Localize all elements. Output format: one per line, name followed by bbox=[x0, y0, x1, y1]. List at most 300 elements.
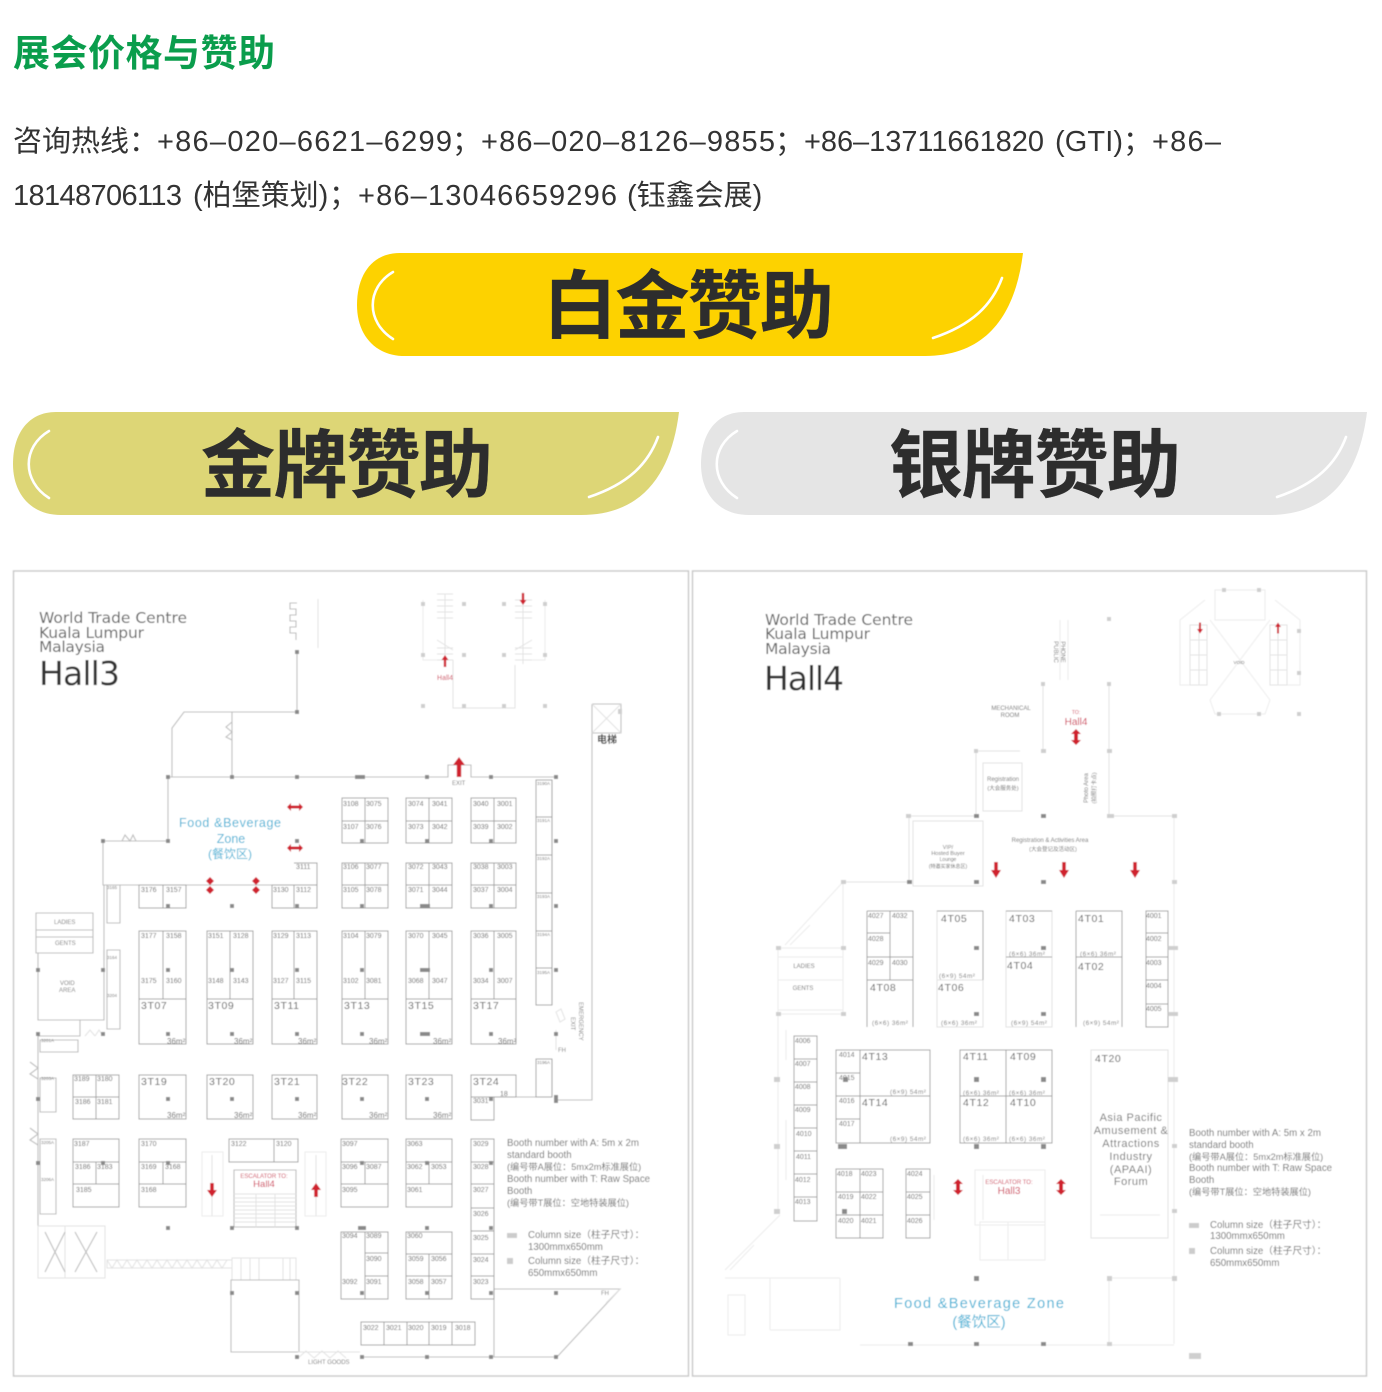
Hall 3 booth areas: 36m² bbox=[433, 1111, 452, 1120]
Hall 3 booth numbers: 3071 bbox=[408, 887, 424, 894]
Hall 3 booth numbers: 3105 bbox=[343, 887, 359, 894]
Hall 4 room labels: (大会登记及活动区) bbox=[1029, 845, 1077, 853]
contact hotline text: ； bbox=[329, 180, 358, 212]
Hall 3 legend: 650mmx650mm bbox=[528, 1268, 597, 1279]
Hall 3 raw space booths: 3T11 bbox=[274, 1000, 300, 1012]
Hall 4 heading: Hall4 bbox=[764, 659, 844, 698]
Hall 4 room labels: MECHANICAL bbox=[991, 706, 1031, 712]
Hall 4 food and beverage zone label: Food &Beverage Zone bbox=[894, 1296, 1064, 1312]
Hall 3 heading: World Trade Centre bbox=[39, 609, 187, 627]
Hall 4 escalator labels bbox=[985, 710, 1088, 1197]
Hall 3 booth numbers: 3186 bbox=[75, 1164, 91, 1171]
Hall 4 room labels: VOID bbox=[1233, 660, 1245, 665]
Hall 3 booth numbers: 3058 bbox=[408, 1279, 424, 1286]
Hall 3 room labels: EMERGENCY bbox=[577, 1002, 583, 1041]
Hall 4 raw space booths: 4T10 bbox=[1010, 1097, 1036, 1109]
Hall 3 stairs to Hall 4 bbox=[423, 592, 545, 708]
Hall 3 escalator labels bbox=[240, 675, 453, 1190]
Hall 3 room labels: 3190A bbox=[537, 781, 550, 786]
contact hotline text: (柏堡策划) bbox=[193, 179, 328, 212]
Hall 3 booth numbers: 3183 bbox=[97, 1164, 113, 1171]
Hall 3 booth numbers: 3036 bbox=[473, 933, 489, 940]
Hall 4 room labels: (大会服务处) bbox=[987, 784, 1019, 792]
Hall 3 booth areas: 36m² bbox=[298, 1037, 317, 1046]
Hall 3 booth numbers: 3043 bbox=[432, 864, 448, 871]
Hall 4 forum label: (APAAI) bbox=[1110, 1164, 1152, 1176]
Hall 3 raw space booths: 3T09 bbox=[208, 1000, 234, 1012]
Hall 3 legend bbox=[507, 1138, 650, 1279]
Hall 4 booth numbers: 4013 bbox=[795, 1199, 811, 1206]
Hall 3 booth numbers: 3091 bbox=[366, 1279, 382, 1286]
Hall 3 heading: Kuala Lumpur bbox=[39, 624, 145, 642]
Hall 3 booth numbers: 3026 bbox=[473, 1211, 489, 1218]
Hall 4 escalator labels: ESCALATOR TO: bbox=[985, 1180, 1033, 1186]
Hall 3 room labels: 3204 bbox=[107, 993, 118, 998]
Hall 4 raw space booths: 4T13 bbox=[862, 1051, 888, 1063]
Hall 3 booth blocks bbox=[73, 798, 516, 1345]
Hall 4 booth numbers: 4019 bbox=[838, 1194, 854, 1201]
Hall 3 booth numbers: 3148 bbox=[208, 978, 224, 985]
Hall 4 heading: Kuala Lumpur bbox=[765, 625, 871, 643]
Hall 3 booth numbers: 3181 bbox=[97, 1099, 113, 1106]
Hall 3 food and beverage zone label: Food &Beverage bbox=[179, 816, 281, 830]
Hall 4 forum label: Asia Pacific bbox=[1100, 1112, 1162, 1124]
Hall 4 food and beverage zone label: (餐饮区) bbox=[952, 1314, 1006, 1331]
Hall 3 raw space booths bbox=[141, 1000, 499, 1088]
Hall 4 room labels: (特邀买家休息区) bbox=[929, 863, 967, 870]
Hall 3 room labels: 3165 bbox=[107, 885, 118, 890]
Hall 3 raw space booths: 3T20 bbox=[209, 1076, 235, 1088]
Hall 3 room labels: 3191A bbox=[537, 818, 550, 823]
Hall 3 booth numbers: 3037 bbox=[473, 887, 489, 894]
Hall 3 legend: (编号带A展位：5mx2m标准展位) bbox=[507, 1161, 641, 1172]
Hall 3 stair columns bbox=[421, 602, 622, 714]
Hall 3 booth numbers: 3096 bbox=[342, 1164, 358, 1171]
Hall 4 room labels: Hosted Buyer bbox=[931, 851, 965, 857]
Hall 4 escalator labels: Hall4 bbox=[1065, 717, 1088, 728]
Hall 4 legend bbox=[1189, 1128, 1332, 1269]
Hall 3 booth areas: 36m² bbox=[498, 1037, 517, 1046]
Hall 3 red arrows bbox=[206, 593, 526, 1197]
Hall 3 booth numbers: 3007 bbox=[497, 978, 513, 985]
Hall 4 booth areas bbox=[872, 951, 1119, 1143]
Hall 4 booth areas: (6×6) 36m² bbox=[963, 1090, 999, 1097]
Hall 4 raw space booths: 4T03 bbox=[1009, 913, 1035, 925]
panel: Hall 3 floor plan bbox=[14, 571, 688, 1376]
Hall 3 booth numbers: 3025 bbox=[473, 1235, 489, 1242]
Hall 3 heading bbox=[39, 609, 187, 693]
contact hotline text: 咨询热线： bbox=[13, 125, 158, 158]
Hall 3 booth numbers: 3130 bbox=[273, 887, 289, 894]
Hall 4 room labels: Photo Area bbox=[1084, 772, 1090, 803]
Hall 4 legend: Booth number with A: 5m x 2m bbox=[1189, 1128, 1321, 1139]
Hall 3 booth numbers: 3021 bbox=[386, 1325, 402, 1332]
Hall 4 booth numbers: 4030 bbox=[892, 960, 908, 967]
Hall 3 booth numbers: 3180 bbox=[97, 1076, 113, 1083]
Hall 4 booth numbers: 4026 bbox=[907, 1218, 923, 1225]
contact hotline text: 18148706113 bbox=[13, 180, 182, 212]
banner: platinum sponsor: 白金赞助 bbox=[543, 265, 834, 348]
Hall 3 room labels: 3192A bbox=[537, 856, 550, 861]
Hall 3 booth numbers: 3095 bbox=[342, 1187, 358, 1194]
Hall 3 booth numbers: 3081 bbox=[366, 978, 382, 985]
Hall 3 booth numbers: 3005 bbox=[497, 933, 513, 940]
Hall 3 booth numbers: 3023 bbox=[473, 1279, 489, 1286]
Hall 4 darker columns bbox=[838, 814, 1046, 1346]
Hall 3 booth numbers: 3029 bbox=[473, 1141, 489, 1148]
Hall 4 room labels bbox=[793, 641, 1245, 992]
Hall 3 booth numbers: 3102 bbox=[343, 978, 359, 985]
Hall 4 structural columns bbox=[774, 588, 1301, 1359]
Hall 3 booth numbers: 3104 bbox=[343, 933, 359, 940]
Hall 3 booth numbers: 3063 bbox=[407, 1141, 423, 1148]
Hall 3 room labels: 3203A bbox=[41, 1076, 54, 1081]
Hall 3 booth numbers: 3097 bbox=[342, 1141, 358, 1148]
Hall 3 booth numbers: 3108 bbox=[343, 801, 359, 808]
Hall 4 booth numbers: 4021 bbox=[861, 1218, 877, 1225]
Hall 3 booth numbers: 3128 bbox=[233, 933, 249, 940]
Hall 4 raw space booths: 4T20 bbox=[1095, 1053, 1121, 1065]
Hall 3 legend: Booth bbox=[507, 1186, 532, 1197]
Hall 3 booth numbers: 3056 bbox=[431, 1256, 447, 1263]
Hall 3 booth numbers: 3079 bbox=[366, 933, 382, 940]
Hall 3 legend: (编号带T展位：空地特装展位) bbox=[507, 1197, 629, 1208]
Hall 4 booth numbers: 4024 bbox=[907, 1171, 923, 1178]
contact hotline text: +86–13711661820 bbox=[804, 126, 1044, 158]
Hall 3 booth numbers: 3094 bbox=[342, 1233, 358, 1240]
Hall 3 booth numbers: 3111 bbox=[296, 864, 311, 871]
Hall 3 room labels: EXIT bbox=[569, 1017, 575, 1031]
Hall 4 room labels: VIP/ bbox=[943, 845, 954, 851]
Hall 4 booth numbers: 4002 bbox=[1146, 936, 1162, 943]
Hall 3 booth numbers: 3168 bbox=[165, 1164, 181, 1171]
Hall 4 room labels: (拍照打卡点) bbox=[1090, 772, 1098, 804]
Hall 4 booth numbers: 4014 bbox=[839, 1052, 855, 1059]
Hall 4 forum label: Forum bbox=[1114, 1176, 1148, 1188]
Hall 3 booth numbers: 3160 bbox=[166, 978, 182, 985]
Hall 3 booth numbers: 3075 bbox=[366, 801, 382, 808]
banner: gold sponsor bbox=[13, 412, 679, 515]
Hall 3 booth areas: 36m² bbox=[167, 1037, 186, 1046]
Hall 3 legend: standard booth bbox=[507, 1150, 572, 1161]
title: 展会价格与赞助 bbox=[13, 33, 275, 74]
Hall 4 room labels: GENTS bbox=[793, 986, 813, 992]
Hall 4 raw space booths: 4T01 bbox=[1078, 913, 1104, 925]
Hall 3 booth numbers: 3089 bbox=[366, 1233, 382, 1240]
Hall 4 booth numbers: 4012 bbox=[795, 1177, 811, 1184]
Hall 3 booth numbers: 3175 bbox=[141, 978, 157, 985]
Hall 4 booth numbers: 4005 bbox=[1146, 1006, 1162, 1013]
Hall 3 booth numbers: 3076 bbox=[366, 824, 382, 831]
Hall 3 booth numbers: 3002 bbox=[497, 824, 513, 831]
Hall 3 booth numbers: 3057 bbox=[431, 1279, 447, 1286]
contact hotline text: +86– bbox=[1152, 126, 1222, 158]
Hall 3 booth numbers: 3158 bbox=[166, 933, 182, 940]
contact hotline text: +86–13046659296 bbox=[358, 180, 617, 212]
Hall 3 booth numbers: 3041 bbox=[432, 801, 448, 808]
Hall 4 booth areas: (6×9) 54m² bbox=[1083, 1020, 1119, 1027]
Hall 4 heading bbox=[764, 611, 913, 698]
Hall 3 room labels: 3195A bbox=[537, 970, 550, 975]
Hall 4 booth numbers: 4028 bbox=[868, 936, 884, 943]
Hall 3 raw space booths: 3T22 bbox=[342, 1076, 368, 1088]
Hall 3 booth numbers: 3122 bbox=[231, 1141, 247, 1148]
Hall 4 room labels: ROOM bbox=[1001, 713, 1019, 719]
Hall 4 red arrows bbox=[953, 622, 1281, 1195]
Hall 4 booth areas: (6×9) 54m² bbox=[890, 1089, 926, 1096]
Hall 3 booth numbers: 3031 bbox=[473, 1098, 489, 1105]
Hall 4 legend: Booth bbox=[1189, 1175, 1214, 1186]
Hall 3 booth areas: 36m² bbox=[234, 1111, 253, 1120]
Hall 4 booth areas: (6×6) 36m² bbox=[1009, 1136, 1045, 1143]
Hall 3 booth numbers: 3186 bbox=[75, 1099, 91, 1106]
banner: gold sponsor: 金牌赞助 bbox=[201, 424, 493, 507]
Hall 4 raw space booths: 4T04 bbox=[1007, 960, 1033, 972]
Hall 3 booth numbers: 3004 bbox=[497, 887, 513, 894]
Hall 3 booth numbers: 3077 bbox=[366, 864, 382, 871]
Hall 3 food and beverage zone label: Zone bbox=[217, 832, 245, 846]
Hall 3 booth numbers: 3018 bbox=[455, 1325, 471, 1332]
Hall 3 room labels: 3206A bbox=[41, 1177, 54, 1182]
Hall 3 escalator labels: ESCALATOR TO: bbox=[240, 1174, 288, 1180]
Hall 3 room labels: AREA bbox=[59, 988, 75, 994]
Hall 3 booth numbers: 3187 bbox=[74, 1141, 90, 1148]
Hall 3 escalator labels: Hall4 bbox=[253, 1179, 275, 1190]
Hall 3 booth numbers: 3127 bbox=[273, 978, 289, 985]
Hall 3 booth numbers: 3061 bbox=[407, 1187, 423, 1194]
Hall 4 booth numbers: 4015 bbox=[839, 1075, 855, 1082]
panel: Hall 4 floor plan bbox=[692, 571, 1366, 1376]
Hall 4 booth numbers: 4003 bbox=[1146, 960, 1162, 967]
Hall 4 booth numbers: 4008 bbox=[795, 1084, 811, 1091]
Hall 3 raw space booths: 3T24 bbox=[473, 1076, 499, 1088]
Hall 3 booth numbers: 3177 bbox=[141, 933, 157, 940]
Hall 3 booth numbers: 3087 bbox=[366, 1164, 382, 1171]
Hall 4 room labels: Registration bbox=[987, 777, 1019, 783]
Hall 3 booth areas: 36m² bbox=[433, 1037, 452, 1046]
Hall 3 booth areas: 36m² bbox=[298, 1111, 317, 1120]
Hall 4 booth numbers: 4007 bbox=[795, 1061, 811, 1068]
Hall 4 booth numbers: 4020 bbox=[838, 1218, 854, 1225]
Hall 3 booth numbers: 3068 bbox=[408, 978, 424, 985]
Hall 3 booth numbers: 3059 bbox=[408, 1256, 424, 1263]
contact hotline text: ； bbox=[775, 126, 804, 158]
Hall 4 raw space booths: 4T14 bbox=[862, 1097, 888, 1109]
Hall 3 booth numbers: 3092 bbox=[342, 1279, 358, 1286]
Hall 4 raw space booths: 4T06 bbox=[938, 982, 964, 994]
Hall 3 booth numbers: 3045 bbox=[432, 933, 448, 940]
Hall 3 booth numbers: 3120 bbox=[276, 1141, 292, 1148]
Hall 4 legend: 650mmx650mm bbox=[1210, 1258, 1279, 1269]
Hall 3 booth numbers: 3044 bbox=[432, 887, 448, 894]
Hall 3 booth numbers: 3019 bbox=[431, 1325, 447, 1332]
Hall 3 booth numbers: 3020 bbox=[408, 1325, 424, 1332]
elevator label: 电梯 bbox=[597, 733, 617, 746]
Hall 4 booth numbers: 4017 bbox=[839, 1121, 855, 1128]
Hall 4 legend: Booth number with T: Raw Space bbox=[1189, 1163, 1332, 1174]
Hall 3 booth numbers: 3112 bbox=[296, 887, 311, 894]
Hall 3 booth numbers: 3062 bbox=[407, 1164, 423, 1171]
Hall 3 room labels: FH bbox=[558, 1048, 566, 1054]
Hall 3 room labels: 3201A bbox=[41, 1038, 54, 1043]
Hall 3 booth numbers: 3170 bbox=[141, 1141, 157, 1148]
Hall 4 legend: 1300mmx650mm bbox=[1210, 1231, 1285, 1242]
Hall 3 legend: Column size（柱子尺寸）： bbox=[528, 1228, 644, 1241]
Hall 3 booth numbers: 3176 bbox=[141, 887, 157, 894]
contact hotline text: (GTI) bbox=[1055, 126, 1123, 158]
Hall 3 booth numbers: 3073 bbox=[408, 824, 424, 831]
Hall 4 forum label: Industry bbox=[1109, 1151, 1153, 1163]
Hall 4 booth numbers: 4004 bbox=[1146, 983, 1162, 990]
Hall 3 food and beverage zone label: (餐饮区) bbox=[208, 846, 252, 861]
Hall 3 booth numbers: 3039 bbox=[473, 824, 489, 831]
Hall 3 booth numbers: 3022 bbox=[363, 1325, 379, 1332]
Hall 3 booth numbers: 3185 bbox=[76, 1187, 92, 1194]
Hall 3 booth numbers: 3189 bbox=[74, 1076, 90, 1083]
Hall 3 room labels: 3164 bbox=[107, 955, 118, 960]
Hall 4 booth areas: (6×6) 36m² bbox=[872, 1020, 908, 1027]
Hall 4 booth numbers: 4009 bbox=[795, 1107, 811, 1114]
Hall 3 booth numbers: 3060 bbox=[407, 1233, 423, 1240]
Hall 4 booth areas: (6×6) 36m² bbox=[941, 1020, 977, 1027]
Hall 4 raw space booths: 4T05 bbox=[941, 913, 967, 925]
Hall 3 booth numbers: 3168 bbox=[141, 1187, 157, 1194]
Hall 3 legend: 1300mmx650mm bbox=[528, 1242, 603, 1253]
Hall 4 booth areas: (6×9) 54m² bbox=[939, 973, 975, 980]
Hall 4 raw space booths: 4T12 bbox=[963, 1097, 989, 1109]
Hall 4 booth areas: (6×6) 36m² bbox=[1080, 951, 1116, 958]
Hall 4 booth blocks bbox=[778, 763, 1168, 1238]
Hall 3 booth numbers: 3169 bbox=[141, 1164, 157, 1171]
Hall 3 booth numbers: 3106 bbox=[343, 864, 359, 871]
Hall 3 legend: Booth number with A: 5m x 2m bbox=[507, 1138, 639, 1149]
Hall 3 room labels: LIGHT GOODS bbox=[308, 1360, 350, 1366]
Hall 3 raw space booths: 3T23 bbox=[408, 1076, 434, 1088]
Hall 3 booth areas: 36m² bbox=[369, 1037, 388, 1046]
Hall 4 heading: Malaysia bbox=[765, 640, 831, 658]
Hall 3 room labels: 3196A bbox=[537, 1060, 550, 1065]
Hall 4 forum label bbox=[1094, 1112, 1168, 1188]
Hall 3 booth numbers: 3143 bbox=[233, 978, 249, 985]
Hall 4 booth areas: (6×6) 36m² bbox=[1009, 951, 1045, 958]
Hall 4 raw space booths: 4T11 bbox=[963, 1051, 989, 1063]
Hall 4 walls bbox=[725, 590, 1300, 1345]
banner: silver sponsor bbox=[701, 412, 1367, 515]
Hall 3 food and beverage zone label bbox=[179, 816, 281, 861]
Hall 3 room labels: VOID bbox=[60, 981, 75, 987]
Hall 3 booth numbers bbox=[74, 801, 513, 1332]
Hall 4 legend: Column size（柱子尺寸）： bbox=[1210, 1218, 1326, 1231]
Hall 3 legend: Booth number with T: Raw Space bbox=[507, 1174, 650, 1185]
Hall 3 room labels: 3193A bbox=[537, 894, 550, 899]
contact hotline text: (钰鑫会展) bbox=[627, 179, 762, 212]
banner: silver sponsor: 银牌赞助 bbox=[889, 424, 1181, 507]
Hall 3 raw space booths: 3T17 bbox=[473, 1000, 499, 1012]
Hall 4 forum label: Attractions bbox=[1102, 1138, 1160, 1150]
Hall 3 booth numbers: 3115 bbox=[296, 978, 311, 985]
Hall 4 room labels: Lounge bbox=[940, 857, 957, 863]
contact hotline text: +86–020–8126–9855 bbox=[481, 126, 775, 158]
Hall 3 heading: Malaysia bbox=[39, 638, 105, 656]
banner: platinum sponsor bbox=[357, 253, 1023, 356]
Hall 4 room labels: PHONE bbox=[1059, 641, 1065, 663]
Hall 4 escalator labels: TO: bbox=[1072, 710, 1080, 716]
Hall 3 raw space booths: 3T07 bbox=[141, 1000, 167, 1012]
Hall 3 legend: Column size（柱子尺寸）： bbox=[528, 1254, 644, 1267]
Hall 4 booth numbers: 4029 bbox=[868, 960, 884, 967]
Hall 4 booth numbers: 4022 bbox=[861, 1194, 877, 1201]
Hall 4 food and beverage zone label bbox=[894, 1296, 1064, 1331]
Hall 4 legend: standard booth bbox=[1189, 1140, 1254, 1151]
Hall 3 structural columns bbox=[36, 650, 558, 1359]
Hall 3 room labels: EXIT bbox=[452, 781, 466, 787]
Hall 3 room labels: GENTS bbox=[55, 941, 76, 947]
Hall 3 heading: Hall3 bbox=[39, 654, 120, 693]
Hall 3 booth numbers: 3053 bbox=[431, 1164, 447, 1171]
Hall 4 booth numbers: 4027 bbox=[868, 913, 884, 920]
Hall 4 booth numbers: 4032 bbox=[892, 913, 908, 920]
Hall 3 booth numbers: 3129 bbox=[273, 933, 289, 940]
Hall 3 room labels: 3205A bbox=[41, 1140, 54, 1145]
Hall 3 booth areas: 36m² bbox=[167, 1111, 186, 1120]
Hall 3 raw space booths: 3T15 bbox=[408, 1000, 434, 1012]
contact hotline text: ； bbox=[1123, 126, 1152, 158]
Hall 3 raw space booths: 3T21 bbox=[274, 1076, 300, 1088]
Hall 3 booth areas: 36m² bbox=[369, 1111, 388, 1120]
Hall 3 room labels: FH bbox=[601, 1291, 609, 1297]
Hall 4 booth numbers: 4010 bbox=[796, 1131, 812, 1138]
Hall 4 legend: (编号带T展位：空地特装展位) bbox=[1189, 1186, 1311, 1197]
Hall 3 room labels bbox=[41, 781, 609, 1366]
Hall 4 booth numbers: 4006 bbox=[795, 1038, 811, 1045]
Hall 4 forum label: Amusement & bbox=[1094, 1125, 1168, 1137]
Hall 3 raw space booths: 3T19 bbox=[141, 1076, 167, 1088]
Hall 4 raw space booths bbox=[862, 913, 1121, 1109]
Hall 3 booth numbers: 3028 bbox=[473, 1164, 489, 1171]
Hall 4 room labels: PUBLIC bbox=[1052, 641, 1058, 663]
Hall 3 booth numbers: 3040 bbox=[473, 801, 489, 808]
Hall 4 booth numbers: 4001 bbox=[1146, 913, 1162, 920]
Hall 4 legend: (编号带A展位：5mx2m标准展位) bbox=[1189, 1151, 1323, 1162]
Hall 3 booth numbers: 3157 bbox=[166, 887, 182, 894]
Hall 3 booth numbers: 3042 bbox=[432, 824, 448, 831]
Hall 3 booth numbers: 3107 bbox=[343, 824, 359, 831]
Hall 4 legend: Column size（柱子尺寸）： bbox=[1210, 1244, 1326, 1257]
Hall 4 raw space booths: 4T08 bbox=[870, 982, 896, 994]
Hall 3 booth numbers: 3151 bbox=[208, 933, 224, 940]
Hall 3 booth numbers: 3034 bbox=[473, 978, 489, 985]
Hall 3 raw space booths: 3T13 bbox=[344, 1000, 370, 1012]
Hall 3 room labels: 3194A bbox=[537, 932, 550, 937]
Hall 4 raw space booths: 4T09 bbox=[1010, 1051, 1036, 1063]
Hall 3 booth numbers: 3024 bbox=[473, 1257, 489, 1264]
Hall 4 booth numbers: 4018 bbox=[837, 1171, 853, 1178]
Hall 3 booth numbers: 3113 bbox=[296, 933, 311, 940]
Hall 4 booth numbers: 4016 bbox=[839, 1098, 855, 1105]
Hall 4 escalator labels: Hall3 bbox=[998, 1186, 1021, 1197]
Hall 3 booth numbers: 3070 bbox=[408, 933, 424, 940]
Hall 3 booth numbers: 3074 bbox=[408, 801, 424, 808]
Hall 3 booth numbers: 3072 bbox=[408, 864, 424, 871]
Hall 3 room labels: LADIES bbox=[54, 920, 75, 926]
Hall 4 booth areas: (6×6) 36m² bbox=[1009, 1090, 1045, 1097]
Hall 3 walls bbox=[30, 599, 621, 1358]
Hall 4 room labels: LADIES bbox=[793, 964, 815, 970]
Hall 3 booth numbers: 3090 bbox=[366, 1256, 382, 1263]
Hall 3 booth numbers: 3047 bbox=[432, 978, 448, 985]
Hall 4 booth areas: (6×6) 36m² bbox=[963, 1136, 999, 1143]
Hall 4 booth areas: (6×9) 54m² bbox=[890, 1136, 926, 1143]
